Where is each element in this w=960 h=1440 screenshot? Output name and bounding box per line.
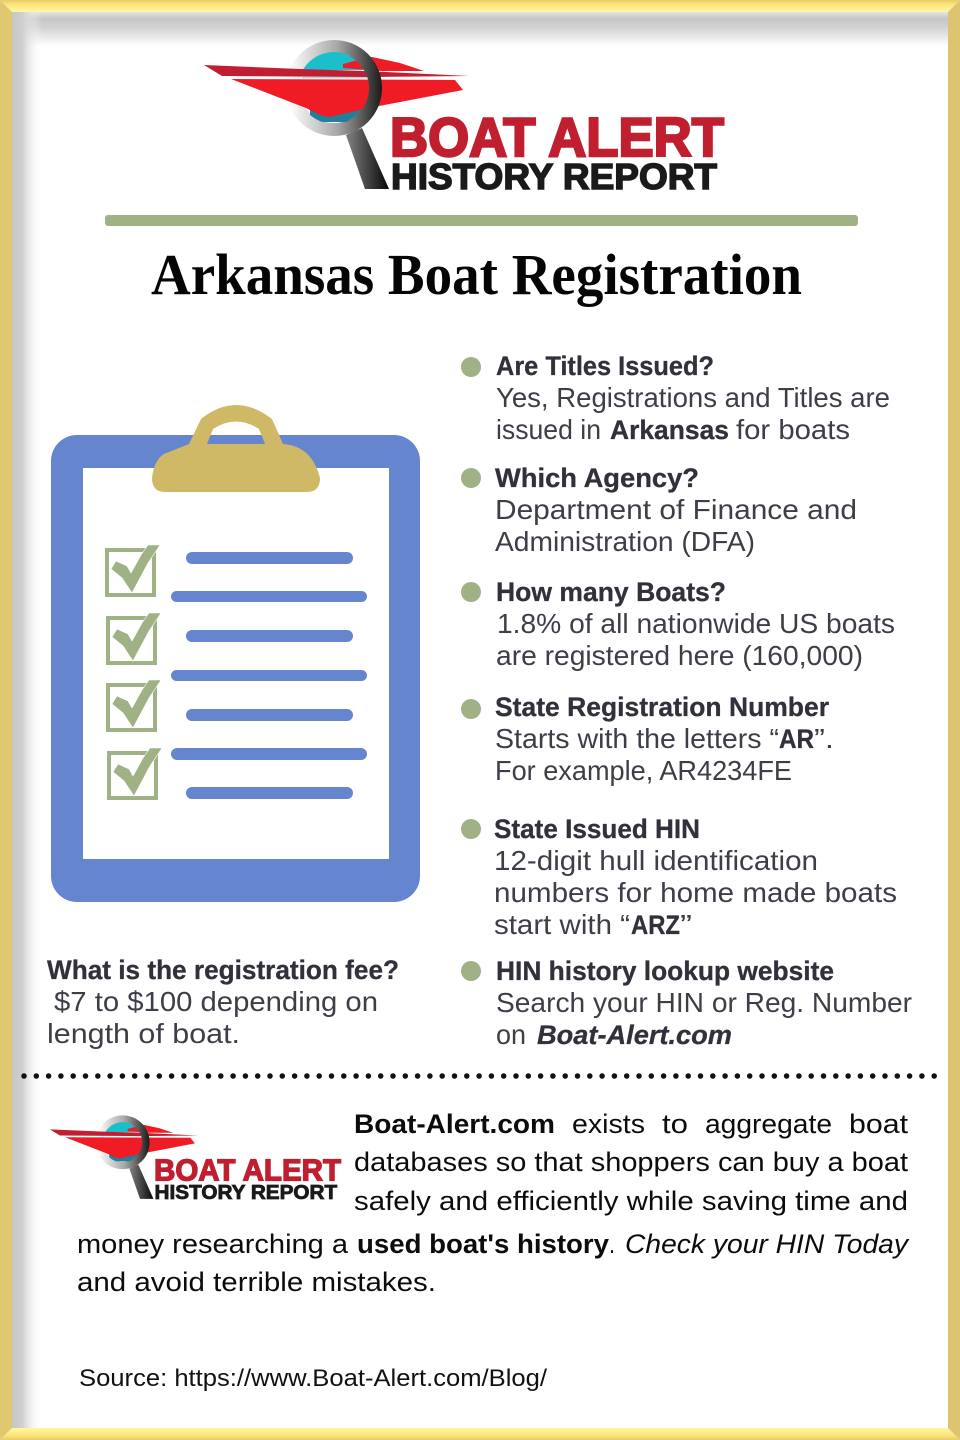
icon: clipboard checklist xyxy=(51,405,420,902)
about paragraph xyxy=(77,1109,910,1297)
list item: HIN history lookup website: HIN history lookup website xyxy=(496,956,834,986)
list item: state issued HIN: State Issued HIN xyxy=(494,814,700,844)
list item: are titles issued: Are Titles Issued? xyxy=(496,351,714,381)
logo: Boat Alert History Report: BOAT ALERT xyxy=(390,106,724,168)
about paragraph: . xyxy=(609,1229,615,1259)
text block: registration fee: $7 to $100 depending on xyxy=(54,986,378,1017)
list item: state registration number xyxy=(461,692,834,786)
about paragraph: boat xyxy=(849,1109,909,1139)
checkbox 3 xyxy=(108,680,161,730)
list item: which agency xyxy=(461,463,857,557)
list item: state registration number: ”. xyxy=(814,723,834,754)
dotted separator xyxy=(24,1073,936,1079)
clipboard board xyxy=(51,435,420,902)
text block: registration fee xyxy=(47,955,399,1049)
list item: HIN history lookup website: Search your HIN or Reg. Number xyxy=(496,987,912,1018)
checklist lines xyxy=(171,552,367,799)
about paragraph: and avoid terrible mistakes. xyxy=(77,1267,436,1297)
list item: how many boats: How many Boats? xyxy=(496,577,726,607)
small logo: Boat Alert History Report: HISTORY REPORT xyxy=(155,1182,338,1204)
about paragraph: money researching a xyxy=(77,1229,349,1259)
list item: state registration number: Starts with the letters “ xyxy=(495,723,779,754)
about paragraph: exists xyxy=(572,1109,645,1139)
list item: state issued HIN: numbers for home made boats xyxy=(494,877,897,908)
list item: state issued HIN xyxy=(461,814,897,940)
green divider bar xyxy=(105,215,858,226)
list item: how many boats: 1.8% of all nationwide US boats xyxy=(497,608,895,639)
about paragraph: Check your HIN Today xyxy=(625,1229,910,1259)
about paragraph: Boat-Alert.com xyxy=(354,1109,555,1139)
small logo: Boat Alert History Report xyxy=(50,1119,341,1204)
small logo: Boat Alert History Report: BOAT ALERT xyxy=(154,1152,341,1187)
list item: are titles issued: Arkansas xyxy=(610,415,729,445)
text block: registration fee: length of boat. xyxy=(47,1018,240,1049)
about paragraph: databases so that shoppers can buy a boat xyxy=(354,1147,909,1177)
list item: are titles issued: for boats xyxy=(736,414,850,445)
list item: state issued HIN: ” xyxy=(680,909,692,940)
list item: HIN history lookup website: on xyxy=(496,1019,526,1050)
list item: state registration number: State Registration Number xyxy=(495,692,829,722)
checkbox 4 xyxy=(109,748,162,798)
title: Arkansas Boat Registration xyxy=(151,242,802,307)
list item: are titles issued: issued in xyxy=(496,414,601,445)
logo: Boat Alert History Report: HISTORY REPORT xyxy=(391,156,717,197)
text block: registration fee: What is the registration fee? xyxy=(47,955,399,985)
about paragraph: used boat's history xyxy=(357,1229,609,1259)
clip xyxy=(152,405,320,492)
about paragraph: safely and efficiently while saving time and xyxy=(354,1186,908,1216)
checkbox 2 xyxy=(108,613,161,663)
list item: how many boats: are registered here (160,000) xyxy=(496,640,863,671)
paper xyxy=(83,468,389,859)
list item: state issued HIN: start with “ xyxy=(494,909,630,940)
list item: state issued HIN: ARZ xyxy=(631,910,680,940)
about paragraph: aggregate xyxy=(705,1109,832,1139)
list item: state registration number: For example, AR4234FE xyxy=(495,755,792,786)
list item: how many boats xyxy=(461,577,895,671)
list item: which agency: Department of Finance and xyxy=(495,494,857,525)
list item: state registration number: AR xyxy=(779,724,814,754)
list item: HIN history lookup website: Boat-Alert.com xyxy=(537,1020,732,1050)
list item: state issued HIN: 12-digit hull identification xyxy=(494,845,818,876)
about paragraph: to xyxy=(662,1109,688,1139)
logo: Boat Alert History Report xyxy=(204,46,724,197)
list item: HIN history lookup website xyxy=(461,956,912,1050)
source line: Source: https://www.Boat-Alert.com/Blog/ xyxy=(79,1365,547,1392)
list item: which agency: Which Agency? xyxy=(495,463,699,493)
list item: are titles issued xyxy=(461,351,890,445)
checkbox 1 xyxy=(107,545,160,595)
list item: are titles issued: Yes, Registrations and Titles are xyxy=(496,382,890,413)
list item: which agency: Administration (DFA) xyxy=(495,526,755,557)
